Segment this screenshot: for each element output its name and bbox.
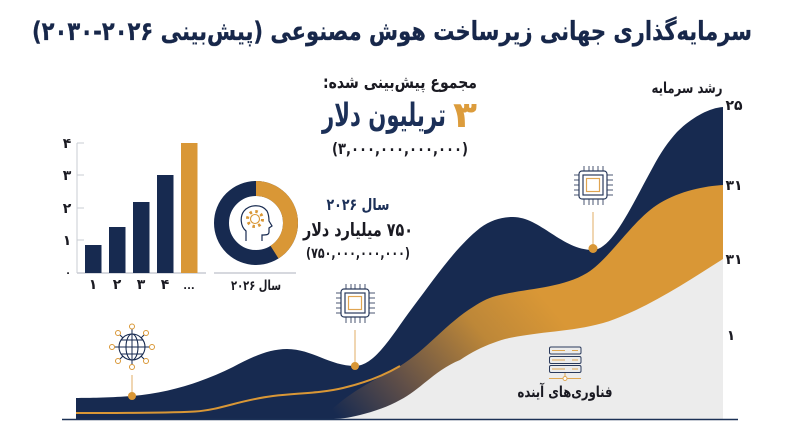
orange area: [320, 185, 723, 419]
bar chart: ۳: [63, 168, 72, 184]
bar chart: ۳: [137, 277, 146, 293]
orange line: [76, 366, 400, 413]
growth axis values: ۲۵: [725, 98, 743, 114]
growth axis values: [725, 98, 743, 344]
total value unit: تریلیون دلار: [321, 96, 446, 134]
2026 value block: [302, 195, 413, 262]
baseline: [62, 418, 738, 420]
grey area: [330, 259, 723, 419]
bar chart: ...: [183, 281, 195, 292]
growth axis values: ۳۱: [725, 178, 743, 194]
marker: globe: [110, 324, 154, 400]
navy area: [76, 107, 723, 419]
growth axis values: ۱: [727, 328, 735, 344]
marker: chip low: [336, 284, 375, 370]
total forecast block: [321, 73, 477, 158]
bar chart: ۲: [63, 201, 72, 217]
total full number: (۳,۰۰۰,۰۰۰,۰۰۰,۰۰۰): [332, 139, 468, 158]
bar chart: ۴: [63, 136, 72, 152]
icon: globe network: [110, 324, 154, 370]
marker: chip high: [574, 166, 613, 253]
bar chart: ۴: [161, 277, 170, 293]
icon: server rack: [549, 347, 581, 380]
bar chart: ۰: [65, 268, 71, 279]
label: فناوری‌های آینده: [518, 383, 612, 401]
icon: head with gear: [241, 206, 272, 241]
value: ۷۵۰ میلیارد دلار: [302, 220, 413, 241]
donut caption: سال ۲۰۲۶: [231, 278, 281, 294]
bar chart: ۲: [113, 277, 122, 293]
bar chart: [63, 136, 206, 293]
total value number: ۳: [453, 95, 477, 136]
total label: مجموع پیش‌بینی شده:: [323, 73, 477, 93]
full number: (۷۵۰,۰۰۰,۰۰۰,۰۰۰): [306, 246, 410, 262]
bar chart: ۱: [63, 233, 71, 249]
icon: chip: [336, 284, 375, 323]
growth axis values: ۳۱: [725, 252, 743, 268]
bar chart: ۱: [89, 277, 97, 293]
future technologies: [518, 347, 612, 401]
donut chart: [214, 188, 296, 294]
icon: chip: [574, 166, 613, 205]
year: سال ۲۰۲۶: [326, 195, 390, 214]
area chart: [76, 107, 723, 419]
growth axis title: رشد سرمایه: [652, 79, 722, 97]
